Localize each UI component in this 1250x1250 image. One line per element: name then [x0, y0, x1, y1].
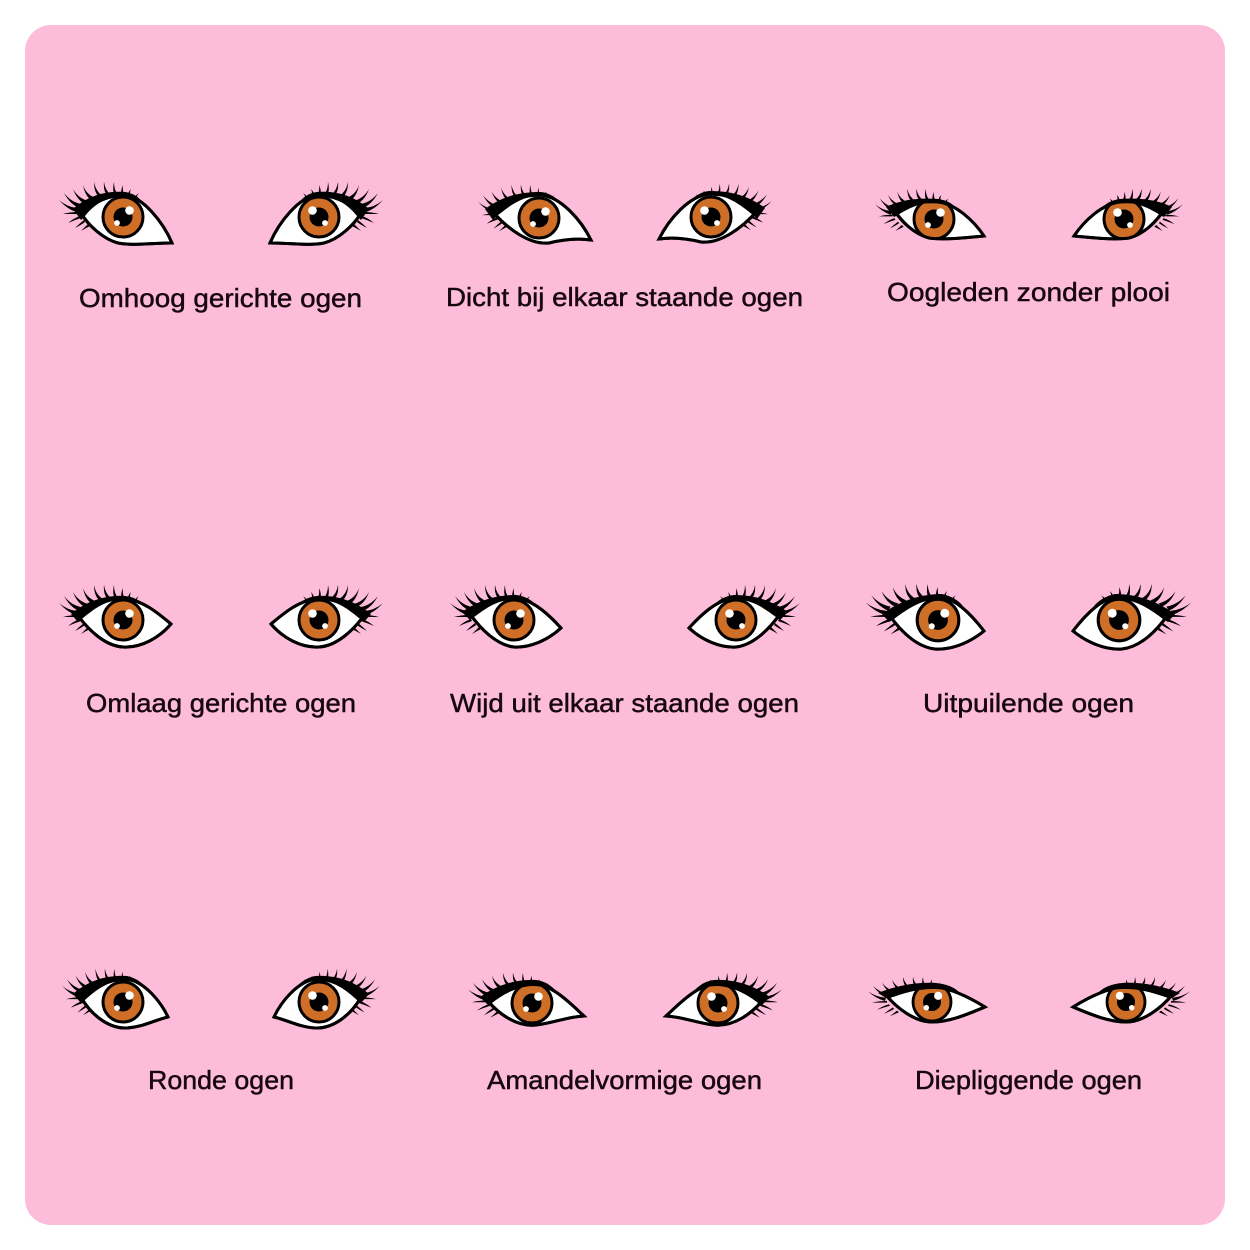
label: Wijd uit elkaar staande ogen: [450, 688, 799, 718]
label: Oogleden zonder plooi: [887, 277, 1170, 307]
eye pair: Ronde ogen: [62, 969, 380, 1095]
right eye: [274, 969, 380, 1028]
label: Omlaag gerichte ogen: [86, 688, 356, 718]
left eye: [875, 189, 984, 239]
left eye: [450, 585, 561, 647]
eye pair: Amandelvormige ogen: [468, 973, 782, 1095]
right eye: [1073, 977, 1190, 1022]
right eye: [659, 184, 772, 242]
left eye: [59, 182, 172, 244]
eye pair: Dicht bij elkaar staande ogen: [446, 184, 803, 312]
label: Uitpuilende ogen: [923, 688, 1134, 718]
right eye: [1074, 189, 1183, 239]
label: Ronde ogen: [148, 1065, 294, 1095]
label: Diepliggende ogen: [915, 1065, 1142, 1095]
right eye: [270, 182, 383, 244]
eye pair: Wijd uit elkaar staande ogen: [450, 585, 800, 718]
right eye: [689, 585, 800, 647]
left eye: [468, 973, 584, 1025]
label: Omhoog gerichte ogen: [79, 283, 362, 313]
eye pair: Diepliggende ogen: [868, 977, 1190, 1095]
left eye: [59, 585, 171, 647]
eye pair: Uitpuilende ogen: [866, 584, 1191, 718]
right eye: [1073, 584, 1191, 649]
left eye: [62, 969, 168, 1028]
label: Dicht bij elkaar staande ogen: [446, 282, 803, 312]
eye pair: Omlaag gerichte ogen: [59, 585, 383, 718]
eye pair: Oogleden zonder plooi: [875, 189, 1183, 307]
right eye: [666, 973, 782, 1025]
left eye: [866, 584, 984, 649]
label: Amandelvormige ogen: [487, 1065, 762, 1095]
right eye: [271, 585, 383, 647]
eye pair: Omhoog gerichte ogen: [59, 182, 383, 313]
left eye: [868, 977, 985, 1022]
left eye: [478, 185, 591, 243]
